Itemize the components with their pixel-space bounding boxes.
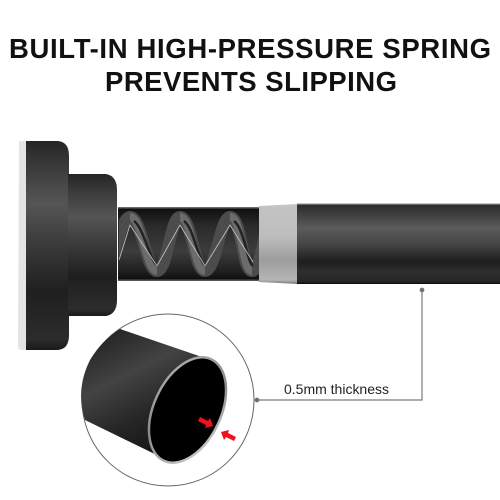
- callout text: 0.5mm thickness: [284, 381, 389, 397]
- spring coil: [105, 217, 265, 271]
- tube opening: [133, 345, 242, 475]
- red arrow outside: [221, 430, 236, 441]
- inner tube: [118, 207, 260, 281]
- callout leader line: [255, 288, 424, 402]
- metal collar: [259, 204, 298, 284]
- illustration: tension rod with spring: [18, 141, 500, 350]
- title: [9, 33, 491, 97]
- wall plate: [18, 141, 27, 350]
- title: BUILT-IN HIGH-PRESSURE SPRING: [9, 33, 491, 64]
- title: PREVENTS SLIPPING: [105, 66, 397, 97]
- inner end cap: [68, 174, 117, 316]
- black rod: [297, 204, 500, 284]
- zoom detail circle: [81, 314, 254, 486]
- outer end cap: [26, 141, 69, 350]
- red arrow inside: [198, 417, 213, 428]
- cut tube body: [81, 329, 205, 459]
